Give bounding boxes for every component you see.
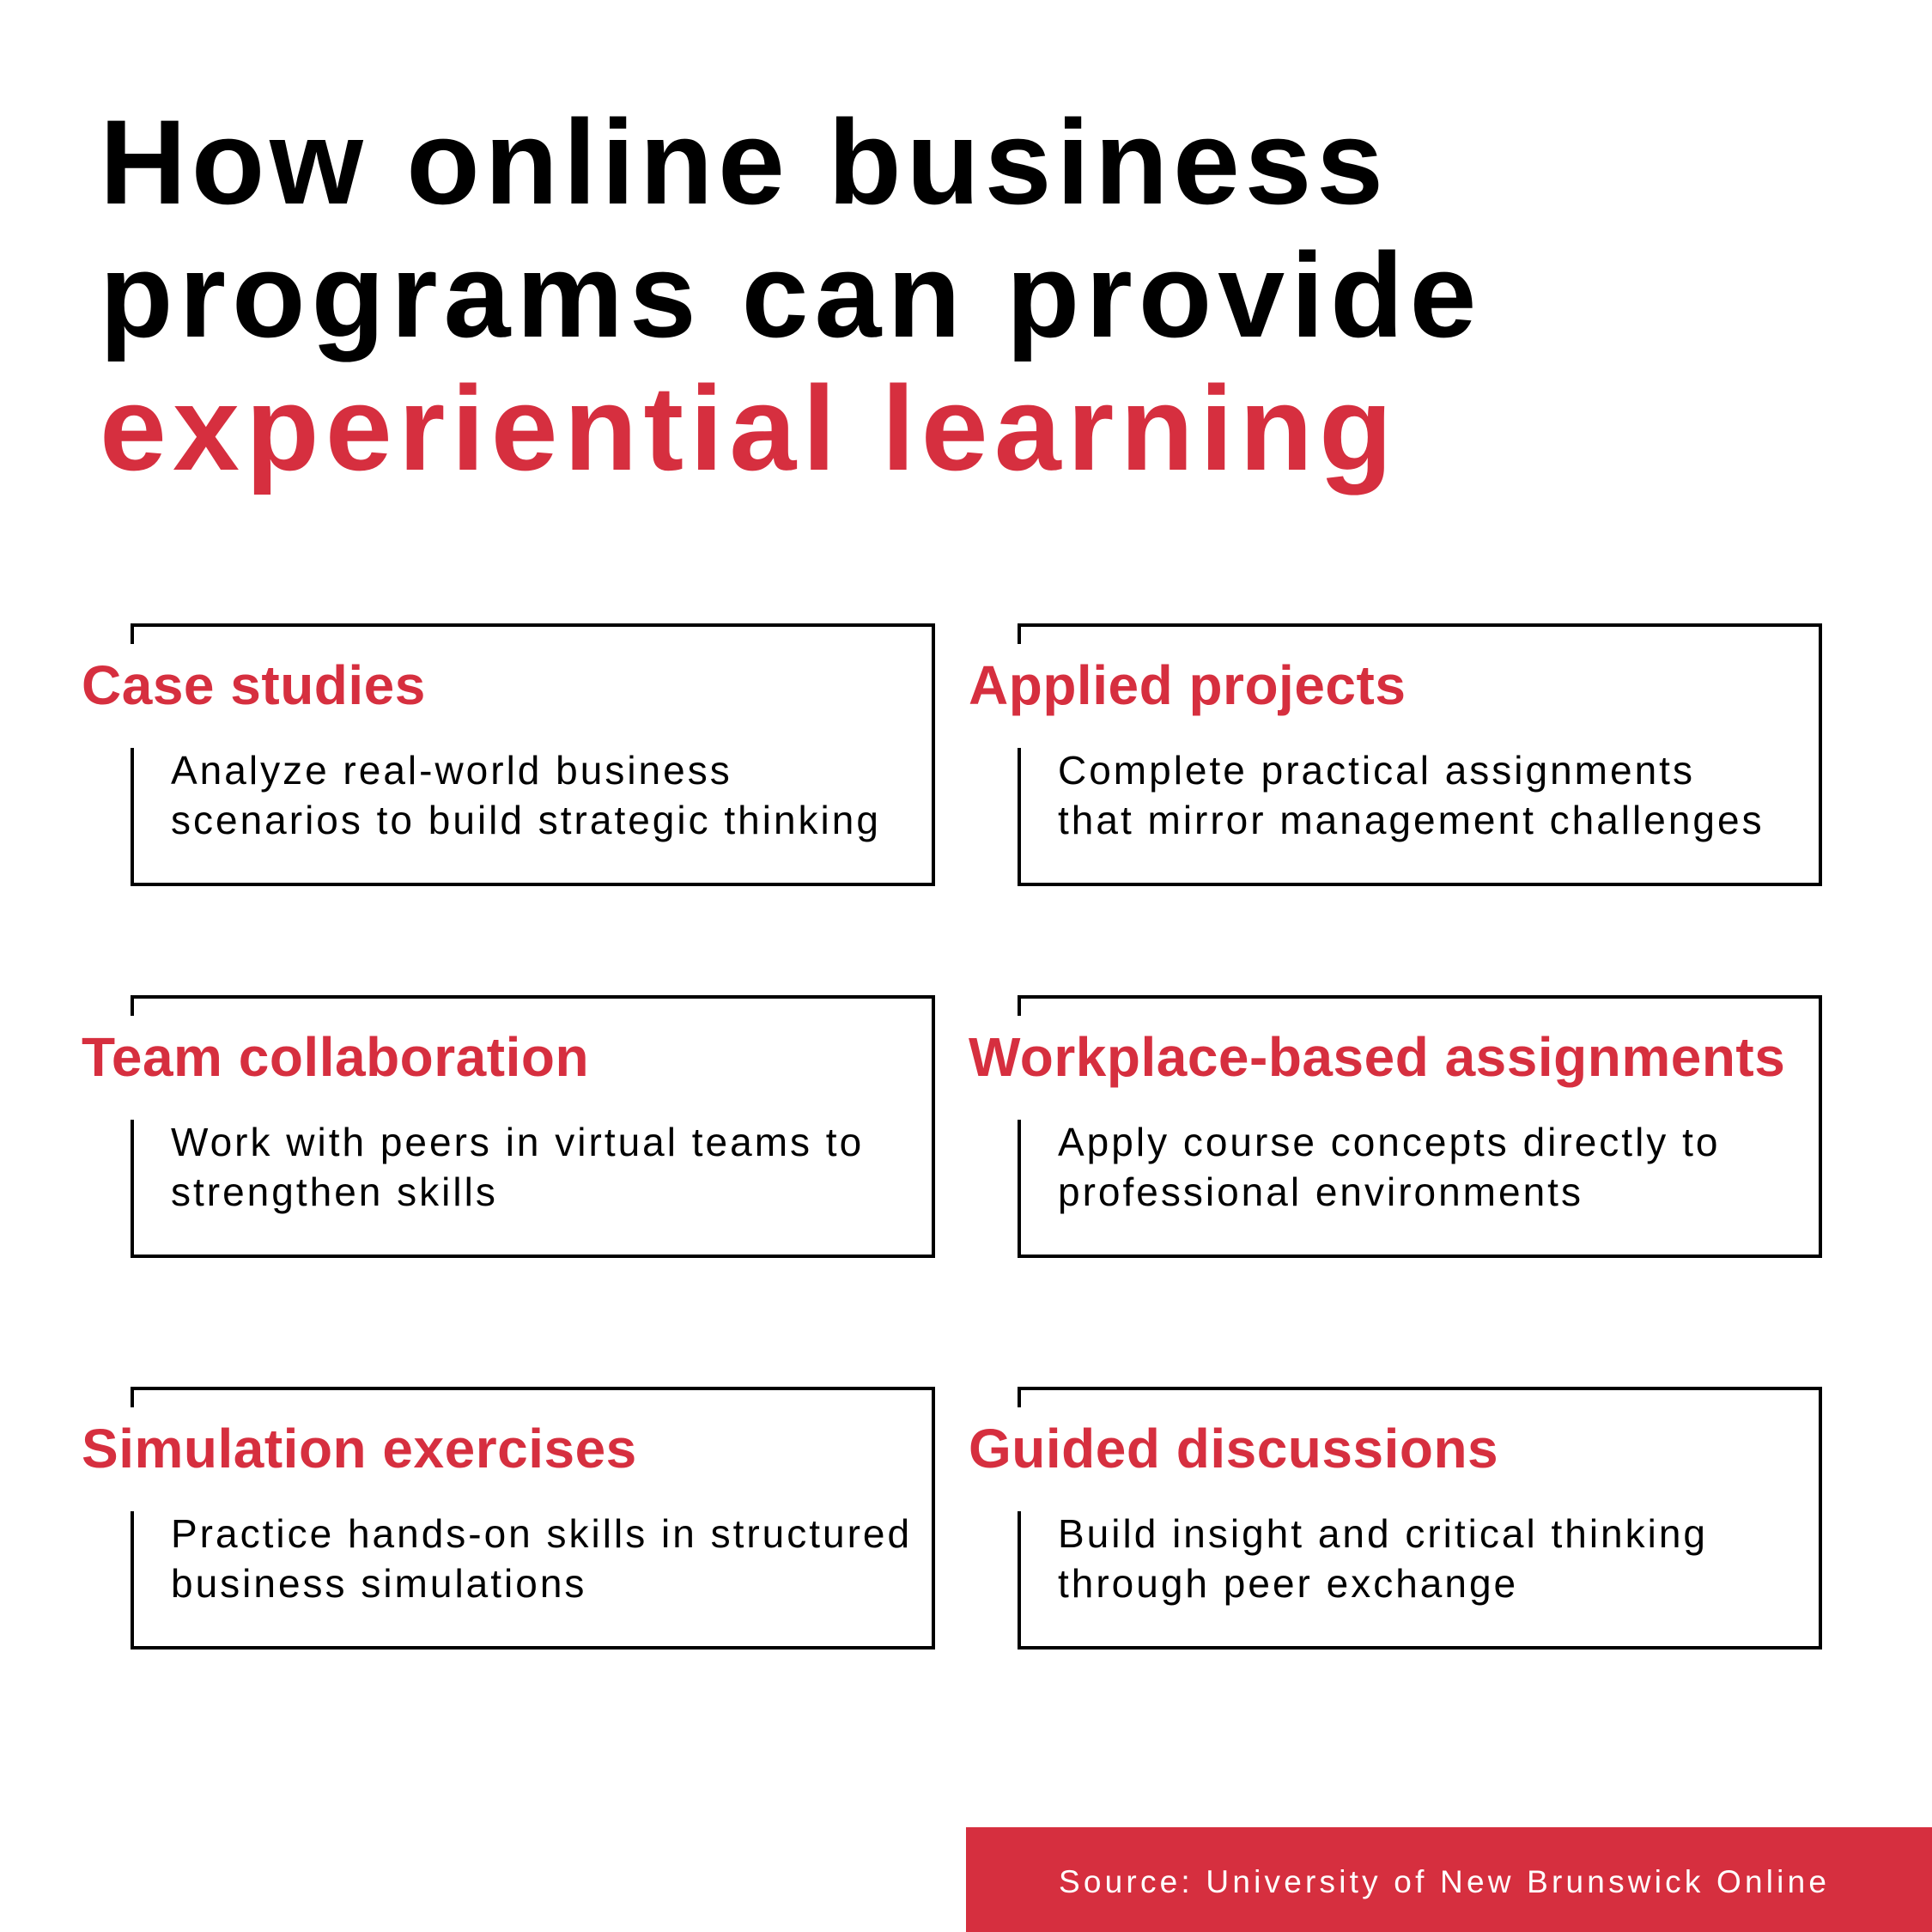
text: case studies: Analyze real-world business xyxy=(171,748,732,793)
text: team collaboration: Work with peers in virtual teams to xyxy=(171,1120,864,1164)
text: guided discussions: Build insight and critical thinking xyxy=(1058,1511,1708,1556)
panel: guided discussions xyxy=(1018,1387,1822,1649)
panel: team collaboration xyxy=(131,995,935,1258)
text: workplace-based assignments: Apply course concepts directly to xyxy=(1058,1120,1720,1164)
heading: guided discussions: Guided discussions xyxy=(969,1418,1498,1479)
panel: case studies xyxy=(131,623,935,886)
text: simulation exercises: Practice hands-on skills in structured xyxy=(171,1511,912,1556)
text: case studies xyxy=(171,748,881,842)
heading: workplace-based assignments: Workplace-based assignments xyxy=(969,1026,1785,1088)
text: workplace-based assignments: professional environments xyxy=(1058,1170,1583,1214)
panel: workplace-based assignments xyxy=(1018,995,1822,1258)
title: experiential learning xyxy=(100,361,1399,495)
text: applied projects xyxy=(1058,748,1765,842)
title xyxy=(100,94,1482,495)
text: guided discussions xyxy=(1058,1511,1708,1606)
panel: simulation exercises xyxy=(131,1387,935,1649)
heading: simulation exercises: Simulation exercises xyxy=(82,1418,637,1479)
text: simulation exercises: business simulations xyxy=(171,1561,586,1606)
heading: team collaboration: Team collaboration xyxy=(82,1026,589,1088)
text: workplace-based assignments xyxy=(1058,1120,1720,1214)
panel: applied projects xyxy=(1018,623,1822,886)
text: simulation exercises xyxy=(171,1511,912,1606)
heading: case studies: Case studies xyxy=(82,654,426,716)
text: case studies: scenarios to build strategic thinking xyxy=(171,798,881,842)
source bar xyxy=(966,1827,1932,1932)
text: applied projects: Complete practical assignments xyxy=(1058,748,1695,793)
title: programs can provide xyxy=(100,228,1482,362)
text: guided discussions: through peer exchange xyxy=(1058,1561,1518,1606)
source bar: Source: University of New Brunswick Online xyxy=(1059,1864,1830,1899)
title: How online business xyxy=(100,94,1388,229)
heading: applied projects: Applied projects xyxy=(969,654,1406,716)
text: team collaboration xyxy=(171,1120,864,1214)
text: team collaboration: strengthen skills xyxy=(171,1170,498,1214)
text: applied projects: that mirror management challenges xyxy=(1058,798,1765,842)
